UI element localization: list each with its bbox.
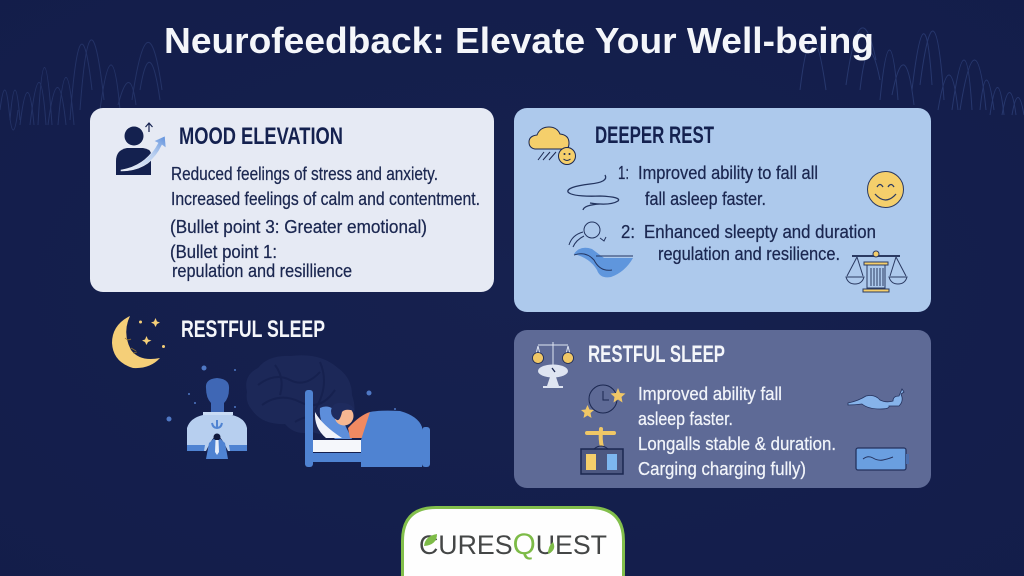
logo: curesquest [402,508,624,576]
panel: deeper rest [514,108,931,312]
icon: stretching figure [848,389,904,409]
point 1: Improved ability to fall all [638,162,818,183]
icon: cloud with smiley [529,127,576,164]
bullet list [170,163,480,281]
title: Neurofeedback: Elevate Your Well-being [164,20,874,61]
panel: restful sleep illustration (left) [112,316,430,467]
bullet list: (Bullet point 3: Greater emotional) [170,216,427,237]
bullet list: Reduced feelings of stress and anxiety. [171,163,438,184]
list: asleep faster. [638,408,733,429]
point 2: Enhanced sleepty and duration [644,221,876,242]
heading: RESTFUL SLEEP [588,341,725,368]
point 2 [621,221,876,264]
icon: swirling wind [568,175,619,210]
wordmark: CURESQUEST [419,528,607,561]
icon: leaves [424,534,554,554]
list: Improved ability fall [638,383,782,404]
icon: charging battery [856,448,909,470]
point 2: 2: [621,221,635,242]
panel: mood elevation [90,108,494,292]
heading: MOOD ELEVATION [179,123,343,150]
icon: smiling face [868,172,904,208]
icon: faint brain [246,355,355,435]
bullet list: repulation and resillience [172,260,352,281]
icon: descending water [569,222,633,277]
icon: scale on pedestal [532,342,574,388]
panel: restful sleep (right) [514,330,931,488]
heading: DEEPER REST [595,122,714,149]
point 1: fall asleep faster. [645,188,766,209]
icon: balance scale [846,251,907,292]
icon: charger with propeller [581,429,623,474]
list [638,383,836,479]
brainwave pattern right [800,28,1024,115]
bullet list: Increased feelings of calm and contentment. [171,188,480,209]
icon: person sleeping in bed [305,390,430,467]
brainwave pattern left [0,40,162,130]
bullet list: (Bullet point 1: [170,241,277,262]
heading: RESTFUL SLEEP [181,316,325,343]
icon: person with rising arrow [116,123,166,175]
list: Longalls stable & duration. [638,433,836,454]
point 2: regulation and resilience. [658,243,840,264]
point 1 [618,162,818,209]
icon: seated person from behind [166,366,247,459]
point 1: 1: [618,162,629,183]
icon: crescent moon with stars [112,316,165,368]
list: Carging charging fully) [638,458,806,479]
icon: clock with stars [581,385,626,418]
